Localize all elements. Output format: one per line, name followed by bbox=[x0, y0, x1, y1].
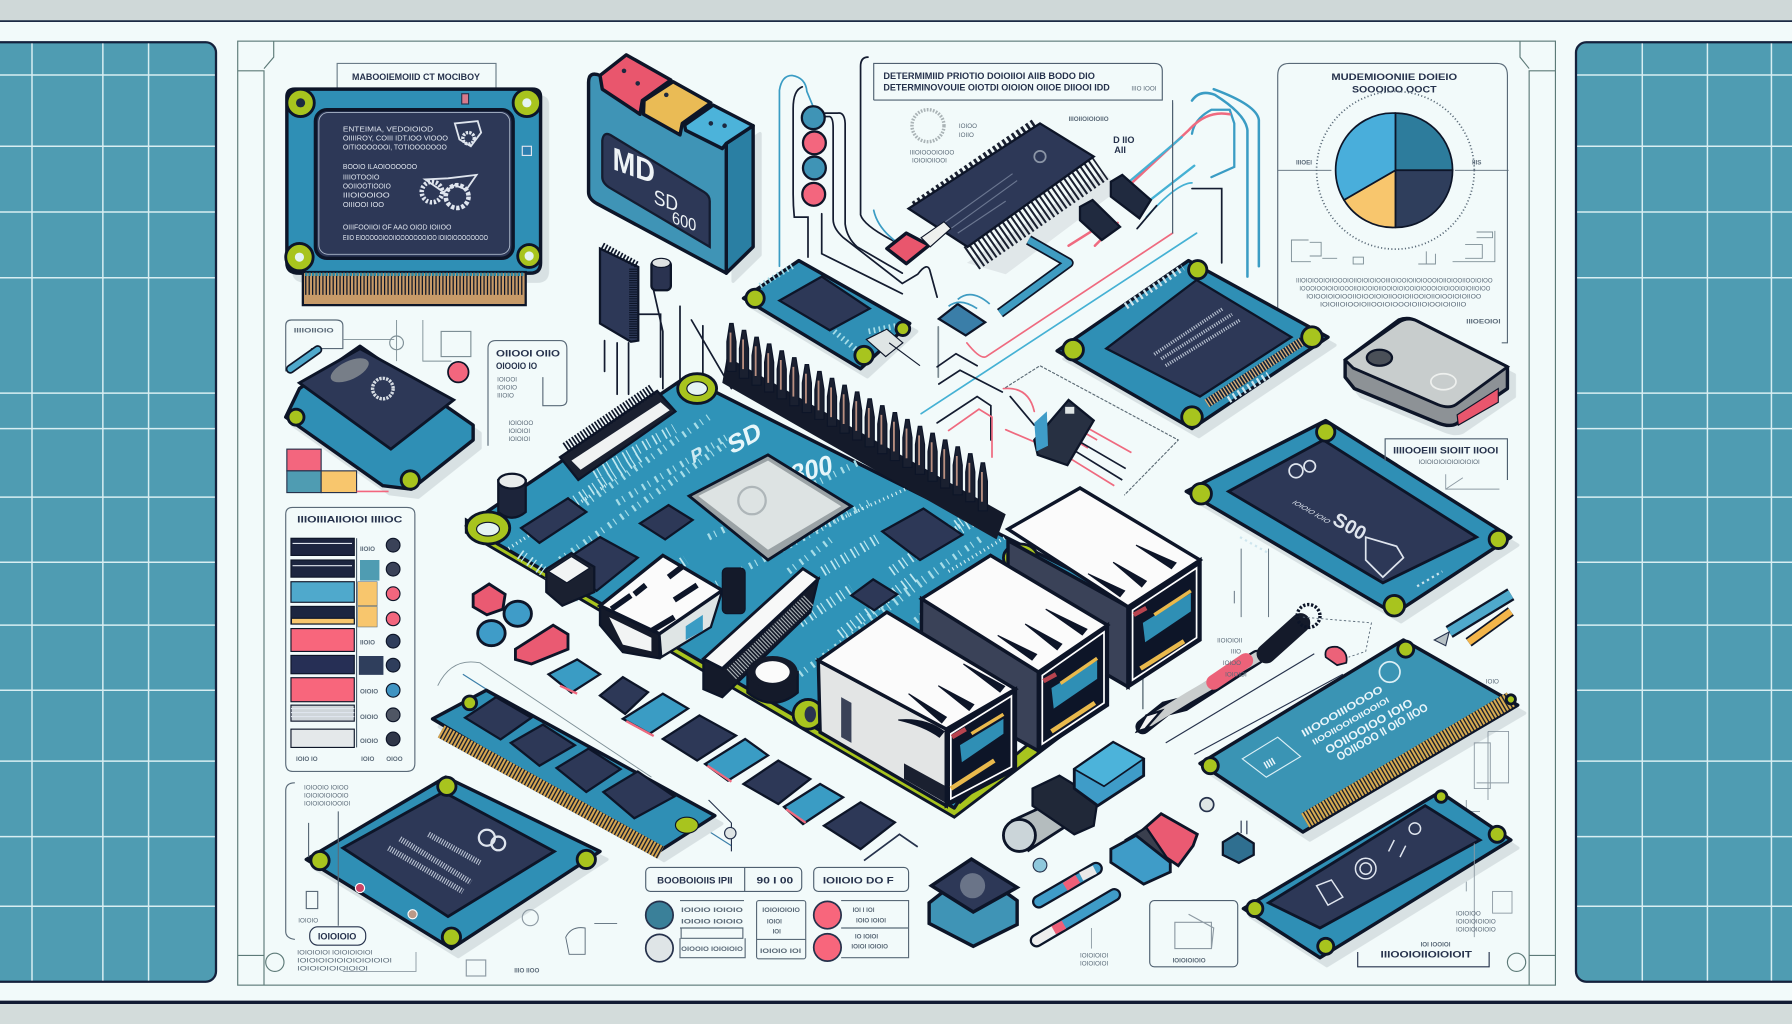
pen 1 bbox=[1039, 869, 1096, 902]
bottom-left notes: IOIOIOIOIOOIO bbox=[304, 793, 349, 800]
panel: left teal grid bbox=[0, 42, 216, 982]
board labels bbox=[689, 417, 834, 491]
black connector 1 bbox=[1111, 175, 1151, 218]
board bbox=[287, 89, 541, 273]
left mini text box: IOIOOI bbox=[497, 377, 517, 384]
small pin marker bbox=[725, 827, 736, 839]
drive side face bbox=[726, 126, 753, 273]
drive front face bbox=[589, 74, 726, 273]
small tall IC bbox=[600, 246, 638, 342]
bottom legend: IOIOI bbox=[767, 918, 782, 925]
camera connector bbox=[1003, 742, 1144, 851]
small diagrams bbox=[1291, 231, 1495, 264]
legend detail boxes bbox=[680, 901, 909, 959]
card heading bbox=[337, 63, 496, 88]
legend bars bbox=[291, 538, 354, 747]
bottom-left notes: IOIOIOIOIOOIOI bbox=[304, 801, 351, 808]
drive label text: 600 bbox=[672, 208, 696, 236]
bottom-right annotation: IOIOIOO bbox=[1456, 910, 1481, 917]
pie description: IOIOIIOIOOIOIIOOIOIOOOIOIIOIOOIOIOIIO bbox=[1320, 301, 1466, 308]
HDMI connector bbox=[600, 555, 745, 658]
panel: pie chart card bbox=[1278, 63, 1509, 343]
left mini text box: OIIOOI OIIO bbox=[496, 349, 560, 359]
pencils bbox=[1434, 594, 1511, 685]
blue ribbon bbox=[1000, 240, 1069, 313]
panel: legend table bbox=[286, 507, 415, 771]
legend labels: IIOIO bbox=[360, 640, 375, 647]
pie ring bbox=[1317, 91, 1474, 249]
legend labels: IOIO IO bbox=[296, 756, 318, 763]
text: IOIOIOIOI bbox=[1080, 961, 1108, 968]
left mid board bbox=[286, 346, 473, 489]
front bbox=[1128, 560, 1200, 687]
legend box 2 bbox=[814, 867, 909, 891]
small framed icon box bbox=[1150, 901, 1238, 967]
board edge bbox=[466, 520, 1097, 817]
left mid sticker label: IIIIOIIOIO bbox=[294, 328, 334, 335]
pie chart bbox=[1336, 113, 1453, 227]
left mini text box: IOIOIOO bbox=[509, 420, 533, 427]
black connector 2 bbox=[1080, 200, 1120, 240]
header text box: IOIIO bbox=[959, 132, 974, 139]
chip text: OIIIOOI IOO bbox=[343, 200, 384, 209]
bottom legend: IOIO IOIOI bbox=[856, 917, 886, 924]
drive label text: SD bbox=[654, 186, 678, 217]
label plate bbox=[602, 134, 710, 247]
RAM chips bbox=[465, 697, 531, 739]
pencils: IOIO bbox=[1486, 678, 1499, 685]
text: IOIOIOIOI bbox=[1080, 953, 1108, 960]
component annotation bbox=[1217, 549, 1269, 679]
blue cap bbox=[685, 105, 753, 149]
chip text: OIIIIROY, COIII IDT.IOO VIOOO bbox=[343, 134, 448, 143]
left mini text box: IOIOIOI bbox=[509, 428, 530, 435]
chip body bbox=[909, 123, 1094, 247]
bottom-left notes: IOIOIO bbox=[298, 917, 318, 924]
right side heading tag: IOIOIOIOIOIOIOIOIOI bbox=[1419, 459, 1480, 466]
board labels: SD bbox=[725, 417, 765, 460]
capacitor bbox=[498, 480, 526, 518]
bottom legend: IOI bbox=[773, 929, 781, 936]
bottom-left notes: IIIO IIOO bbox=[514, 968, 539, 975]
bottom legend: IOIOIOIOIO bbox=[762, 907, 800, 914]
RAM stick bbox=[433, 690, 715, 853]
drive label text: MD bbox=[613, 141, 655, 191]
pink-blue plug bbox=[1111, 814, 1197, 884]
bottom-right chip board bbox=[1243, 791, 1511, 958]
right middle board: S00 bbox=[1329, 509, 1370, 545]
board labels: 800 bbox=[790, 448, 834, 491]
pin header bbox=[722, 323, 1006, 539]
board labels: IIIOOOIIIOOOO bbox=[1300, 684, 1385, 740]
pie heading: MUDEMIOONIIE DOIEIO bbox=[1331, 72, 1457, 82]
pink block bbox=[473, 584, 505, 615]
bottom-left notes bbox=[286, 783, 617, 976]
right middle board: IOIOIO IOIO bbox=[1290, 499, 1334, 525]
bottom-left notes: IOIOIOIOI IOIOIOIOIOI bbox=[297, 949, 373, 956]
pie description: IIIOIOIOOIOIIOOOIOIIOIOIOIOOIIIOIOOIOIIOIOOOIOIIOIOOIIOOIOIOO bbox=[1296, 277, 1493, 284]
main circuit board bbox=[466, 323, 1097, 817]
bottom legend: IOIOIO IOI bbox=[760, 948, 801, 955]
top strip bbox=[0, 0, 1792, 21]
colour swatches bbox=[287, 449, 389, 493]
loose parts bbox=[473, 584, 568, 664]
stacked cube bbox=[929, 859, 1017, 946]
bottom strip bbox=[0, 1003, 1792, 1024]
component annotation: IOIOO bbox=[1223, 660, 1241, 667]
transistor component bbox=[1034, 400, 1131, 486]
left mini text box: IOIOIOI bbox=[509, 436, 530, 443]
legend swatches bbox=[360, 560, 379, 581]
large capacitor bbox=[747, 656, 798, 703]
header text box: D IIO bbox=[1113, 135, 1134, 145]
header text box bbox=[874, 63, 1173, 233]
small chips row bbox=[549, 659, 895, 849]
chip text bbox=[343, 124, 488, 242]
silver drive bbox=[1345, 319, 1507, 425]
panel: legend table: IIIOIIIAIIOIOI IIIIOC bbox=[297, 514, 403, 524]
small framed icon box: IOIOIOIOIO bbox=[1173, 957, 1206, 964]
pen 2 bbox=[1037, 895, 1114, 941]
legend labels bbox=[296, 546, 403, 763]
arrow bbox=[864, 834, 918, 861]
FFC connector bbox=[560, 391, 675, 480]
chip text: BOOIO ILAOIOOOOOO bbox=[343, 162, 417, 171]
left mid sticker label bbox=[286, 320, 471, 371]
board labels: IIOOIIOOIOIIOOIOI bbox=[1311, 696, 1391, 747]
bottom-right annotation bbox=[1358, 891, 1512, 967]
component annotation: IIOIOIOII bbox=[1217, 637, 1242, 644]
legend labels: OIOIO bbox=[360, 689, 378, 696]
left mini text box: OIOOIO IO bbox=[496, 361, 537, 371]
small pads bbox=[462, 94, 469, 104]
right side heading tag bbox=[1385, 439, 1507, 489]
bottom-left notes: IOIOOIO IOIOO bbox=[304, 785, 349, 792]
bottom-right annotation: IOI IOOIOI bbox=[1421, 941, 1451, 948]
board labels: OOIIOOO II OIO IIOO bbox=[1335, 702, 1430, 764]
mounting holes bbox=[286, 89, 541, 271]
inner drawing frame bbox=[238, 41, 1555, 985]
pink dot bbox=[448, 362, 469, 382]
header text box: DETERMIMIID PRIOTIO DOIOIIOI AIIB BODO DIO bbox=[883, 71, 1095, 81]
pink connector bbox=[887, 233, 929, 264]
chip shadow bbox=[967, 171, 1120, 274]
bottom legend: BOOBOIOIIS IPII bbox=[657, 875, 733, 885]
panel: pie chart card: IIIS bbox=[1472, 160, 1481, 167]
board labels: P bbox=[689, 441, 704, 468]
chips bbox=[521, 498, 586, 543]
small blue relay bbox=[1223, 821, 1254, 863]
bottom-left notes: IOIOIOIOIOIOIOI bbox=[297, 965, 368, 972]
chip text: IIIOIOOIOO bbox=[343, 191, 390, 200]
blue cubes bbox=[1074, 742, 1144, 806]
signal dots column bbox=[802, 106, 826, 206]
header text box: IIIOIIOIOIOIIO bbox=[1069, 116, 1109, 123]
chip text: IIIIOTOOIO bbox=[343, 172, 380, 181]
traces bbox=[537, 417, 983, 686]
bottom legend: IO IOIOI bbox=[855, 933, 878, 940]
bottom legend: IOIIOIO DO F bbox=[823, 875, 894, 885]
pie heading: SOOOIOO OOCT bbox=[1352, 85, 1437, 95]
connector schematic bbox=[1443, 731, 1509, 891]
pie description: IIIOEOIOI bbox=[1466, 318, 1501, 325]
bottom legend bbox=[646, 867, 909, 962]
dark chip label bbox=[315, 110, 513, 258]
pie description bbox=[1296, 277, 1501, 325]
top bbox=[1008, 488, 1200, 607]
blue edge-connector board bbox=[1200, 640, 1518, 832]
mount rings bbox=[678, 374, 717, 403]
blue dot 2 bbox=[504, 601, 531, 626]
legend circles bbox=[646, 901, 673, 929]
pink cap marker bbox=[1325, 647, 1347, 665]
blue dot 1 bbox=[478, 621, 505, 646]
mid small board bbox=[744, 261, 920, 369]
legend labels: IIOIO bbox=[360, 546, 375, 553]
pie description: IOIOOIOIOIOOIIOIOOIOIOIIOOIOIIOOIOIIOIOOIOIOIIOO bbox=[1306, 293, 1481, 300]
right side heading tag: IIIIOOEIII SIOIIT IIOOI bbox=[1393, 446, 1498, 456]
chip text: OOIIOOTIOOIO bbox=[343, 182, 391, 191]
bottom legend: OIOOIO IOIOIOIO bbox=[681, 946, 743, 953]
legend dots bbox=[386, 538, 400, 746]
bottom-left notes: IOIOIOIO bbox=[318, 931, 356, 941]
DIP chip with pins bbox=[887, 123, 1151, 335]
panel: pie chart card: IIIOEI bbox=[1296, 160, 1312, 167]
chip text: OITIOOOOOOI, TOTIOOOOOOO bbox=[343, 143, 447, 152]
bottom-right annotation: IOIOIOIOIOIO bbox=[1456, 926, 1496, 933]
pins bbox=[914, 123, 1101, 258]
small capacitor bbox=[651, 258, 671, 290]
pie heading bbox=[1331, 72, 1457, 95]
bottom-right annotation: IIIOOIOIIOIOIOIT bbox=[1381, 950, 1473, 960]
card heading: MABOOIEMOIID CT MOCIBOY bbox=[352, 72, 480, 82]
bottom legend: IOI I IOI bbox=[853, 907, 875, 914]
header text box: IOIOIOIIOOI bbox=[912, 157, 947, 164]
pink cap bbox=[600, 55, 671, 114]
bottom legend: IOIOI IOIOIO bbox=[851, 944, 888, 951]
component annotation: IIIO bbox=[1231, 649, 1241, 656]
bottom-right annotation: IOIOIOIOIOIO bbox=[1456, 918, 1496, 925]
chip text: OIIIFOOIIOI OF AAO OIOD IOIIOO bbox=[343, 223, 452, 232]
bottom legend: 90 I 00 bbox=[757, 875, 793, 885]
component annotation: IOIOIOI bbox=[1225, 672, 1247, 679]
pen tool with pink sleeve bbox=[1137, 605, 1320, 731]
right middle board bbox=[1186, 421, 1511, 616]
side bbox=[1008, 541, 1128, 687]
legend labels: IOIO bbox=[361, 756, 374, 763]
chip text: EIIO EIOOOOOIOOIIOOOOOOOIOO IOIIOIOOOOOOOO bbox=[343, 233, 488, 242]
black housing bbox=[1033, 776, 1098, 834]
drive label text bbox=[613, 141, 696, 236]
pink block long bbox=[515, 625, 568, 664]
small USB port bbox=[546, 553, 594, 606]
yellow cap bbox=[643, 82, 711, 135]
left mini text box: IOIOIO bbox=[497, 385, 517, 392]
connector edge bbox=[303, 272, 526, 305]
panel: right teal grid bbox=[1576, 42, 1792, 982]
panel: SSD drive bbox=[589, 55, 753, 273]
legend box 1 bbox=[646, 867, 802, 891]
card slot bbox=[703, 569, 818, 697]
wires and connectors around the DIP chip bbox=[605, 57, 1259, 709]
header text box: AII bbox=[1114, 145, 1126, 155]
header text box: IOIOO bbox=[959, 123, 977, 130]
board labels bbox=[1300, 684, 1430, 764]
bottom-left board bbox=[306, 777, 600, 949]
left mini text box bbox=[488, 341, 567, 446]
header text box: IIIO IOOI bbox=[1131, 85, 1157, 92]
header text box: IIIOIOOOIOIOO bbox=[910, 149, 954, 156]
silver CPU bbox=[689, 455, 851, 560]
ethernet jack 1 bbox=[818, 612, 1015, 806]
panel: top-left storage card bbox=[286, 63, 541, 305]
bottom-left notes: IOIOIOIOIOIOIOIOIOIOI bbox=[297, 957, 392, 964]
silver ball bbox=[1200, 798, 1214, 811]
silver lens bbox=[1013, 800, 1067, 850]
chip text: ENTEIMIA, VEDOIOIOD bbox=[343, 124, 433, 133]
legend labels: OIOIO bbox=[360, 738, 378, 745]
ethernet jack 3 bbox=[1008, 488, 1200, 687]
board surface bbox=[466, 377, 1097, 808]
legend labels: OIOIO bbox=[360, 714, 378, 721]
ethernet jack 2 bbox=[921, 555, 1107, 751]
bottom legend: IOIOIO IOIOIO bbox=[681, 907, 743, 914]
pie description: IOOOIOOIOIOIOOOIIOIOOIOIIOOIOIOIOOIOIOOOIOIOIOOIOIOIIOIOO bbox=[1299, 285, 1490, 292]
legend labels: OIOO bbox=[386, 756, 403, 763]
board labels: OOIIOOIOO IOIO bbox=[1324, 697, 1415, 757]
header text box: DETERMINOVOUIE OIOTDI OIOION OIIOE DIIOOI IDD bbox=[883, 82, 1110, 92]
ribbon plug bbox=[939, 304, 985, 335]
top-right board with chip bbox=[1057, 261, 1328, 429]
bottom legend: IOIOIO IOIOIO bbox=[681, 918, 743, 925]
blue edge-connector board: IIII bbox=[1262, 756, 1278, 772]
icon: raspberry logos bbox=[422, 121, 481, 208]
left mini text box: IIIOIO bbox=[497, 393, 514, 400]
